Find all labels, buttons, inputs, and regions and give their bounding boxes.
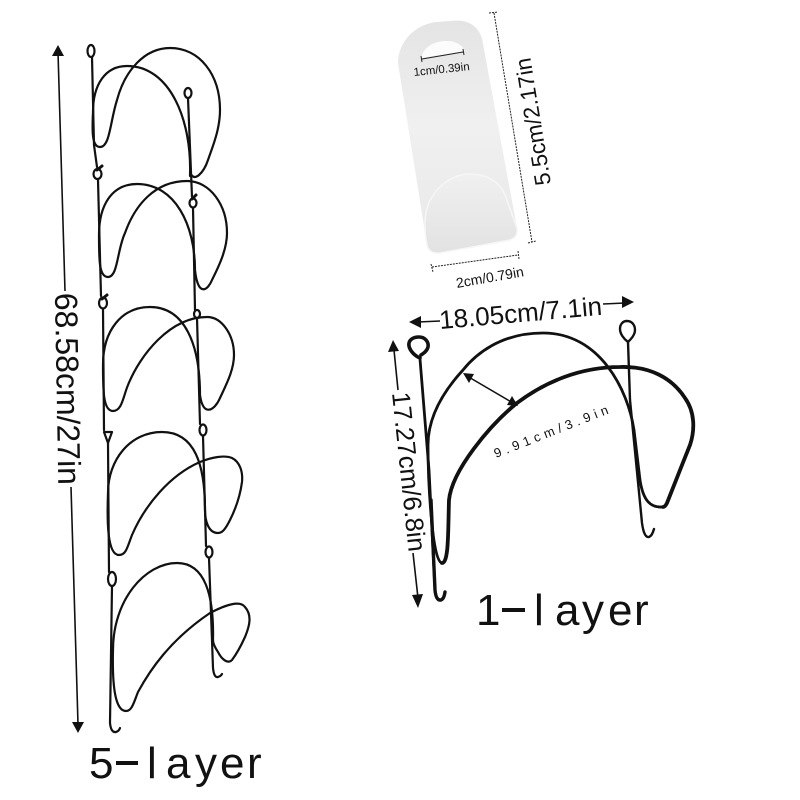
wire front arch [442, 367, 693, 563]
5-layer right rod with eyes and hook [184, 88, 222, 677]
wire layer 2 [99, 181, 227, 289]
hook hole [421, 41, 465, 58]
hole width dimension: 1cm/0.39in [413, 61, 470, 79]
right rod with eye and hook [620, 321, 654, 537]
panel: 5-layer rack [48, 45, 262, 788]
hook semicircular cap [425, 174, 517, 253]
5-layer height arrow [52, 45, 84, 733]
1-layer height dimension: 17.27cm/6.8in [386, 391, 431, 553]
wire layer 4 [108, 432, 242, 555]
1-layer caption: 1-layer [476, 583, 649, 635]
panel: adhesive hook photo [398, 12, 556, 291]
wire layer 5 [113, 563, 250, 711]
depth label: 9.91cm/3.9in [492, 401, 614, 461]
wire layer 1 [93, 48, 220, 177]
wire layer 3 [103, 307, 234, 411]
1-layer width dimension: 18.05cm/7.1in [438, 291, 603, 335]
1-layer height dimension [386, 340, 431, 608]
5-layer caption: 5-layer [89, 736, 262, 788]
hook height dimension: 5.5cm/2.17in [510, 56, 556, 187]
panel: 1-layer rack [386, 291, 693, 635]
hook width dimension [431, 251, 525, 291]
left rod with eye and hook [409, 337, 445, 600]
5-layer height label: 68.58cm/27in [48, 292, 87, 485]
wire rear arch [428, 333, 663, 563]
hole width dimension [413, 49, 470, 79]
hook height dimension [489, 12, 556, 243]
hook width dimension: 2cm/0.79in [455, 263, 525, 291]
hook body [398, 21, 517, 253]
depth arrow [463, 373, 518, 406]
5-layer left rod with eyes and hook [88, 45, 120, 732]
